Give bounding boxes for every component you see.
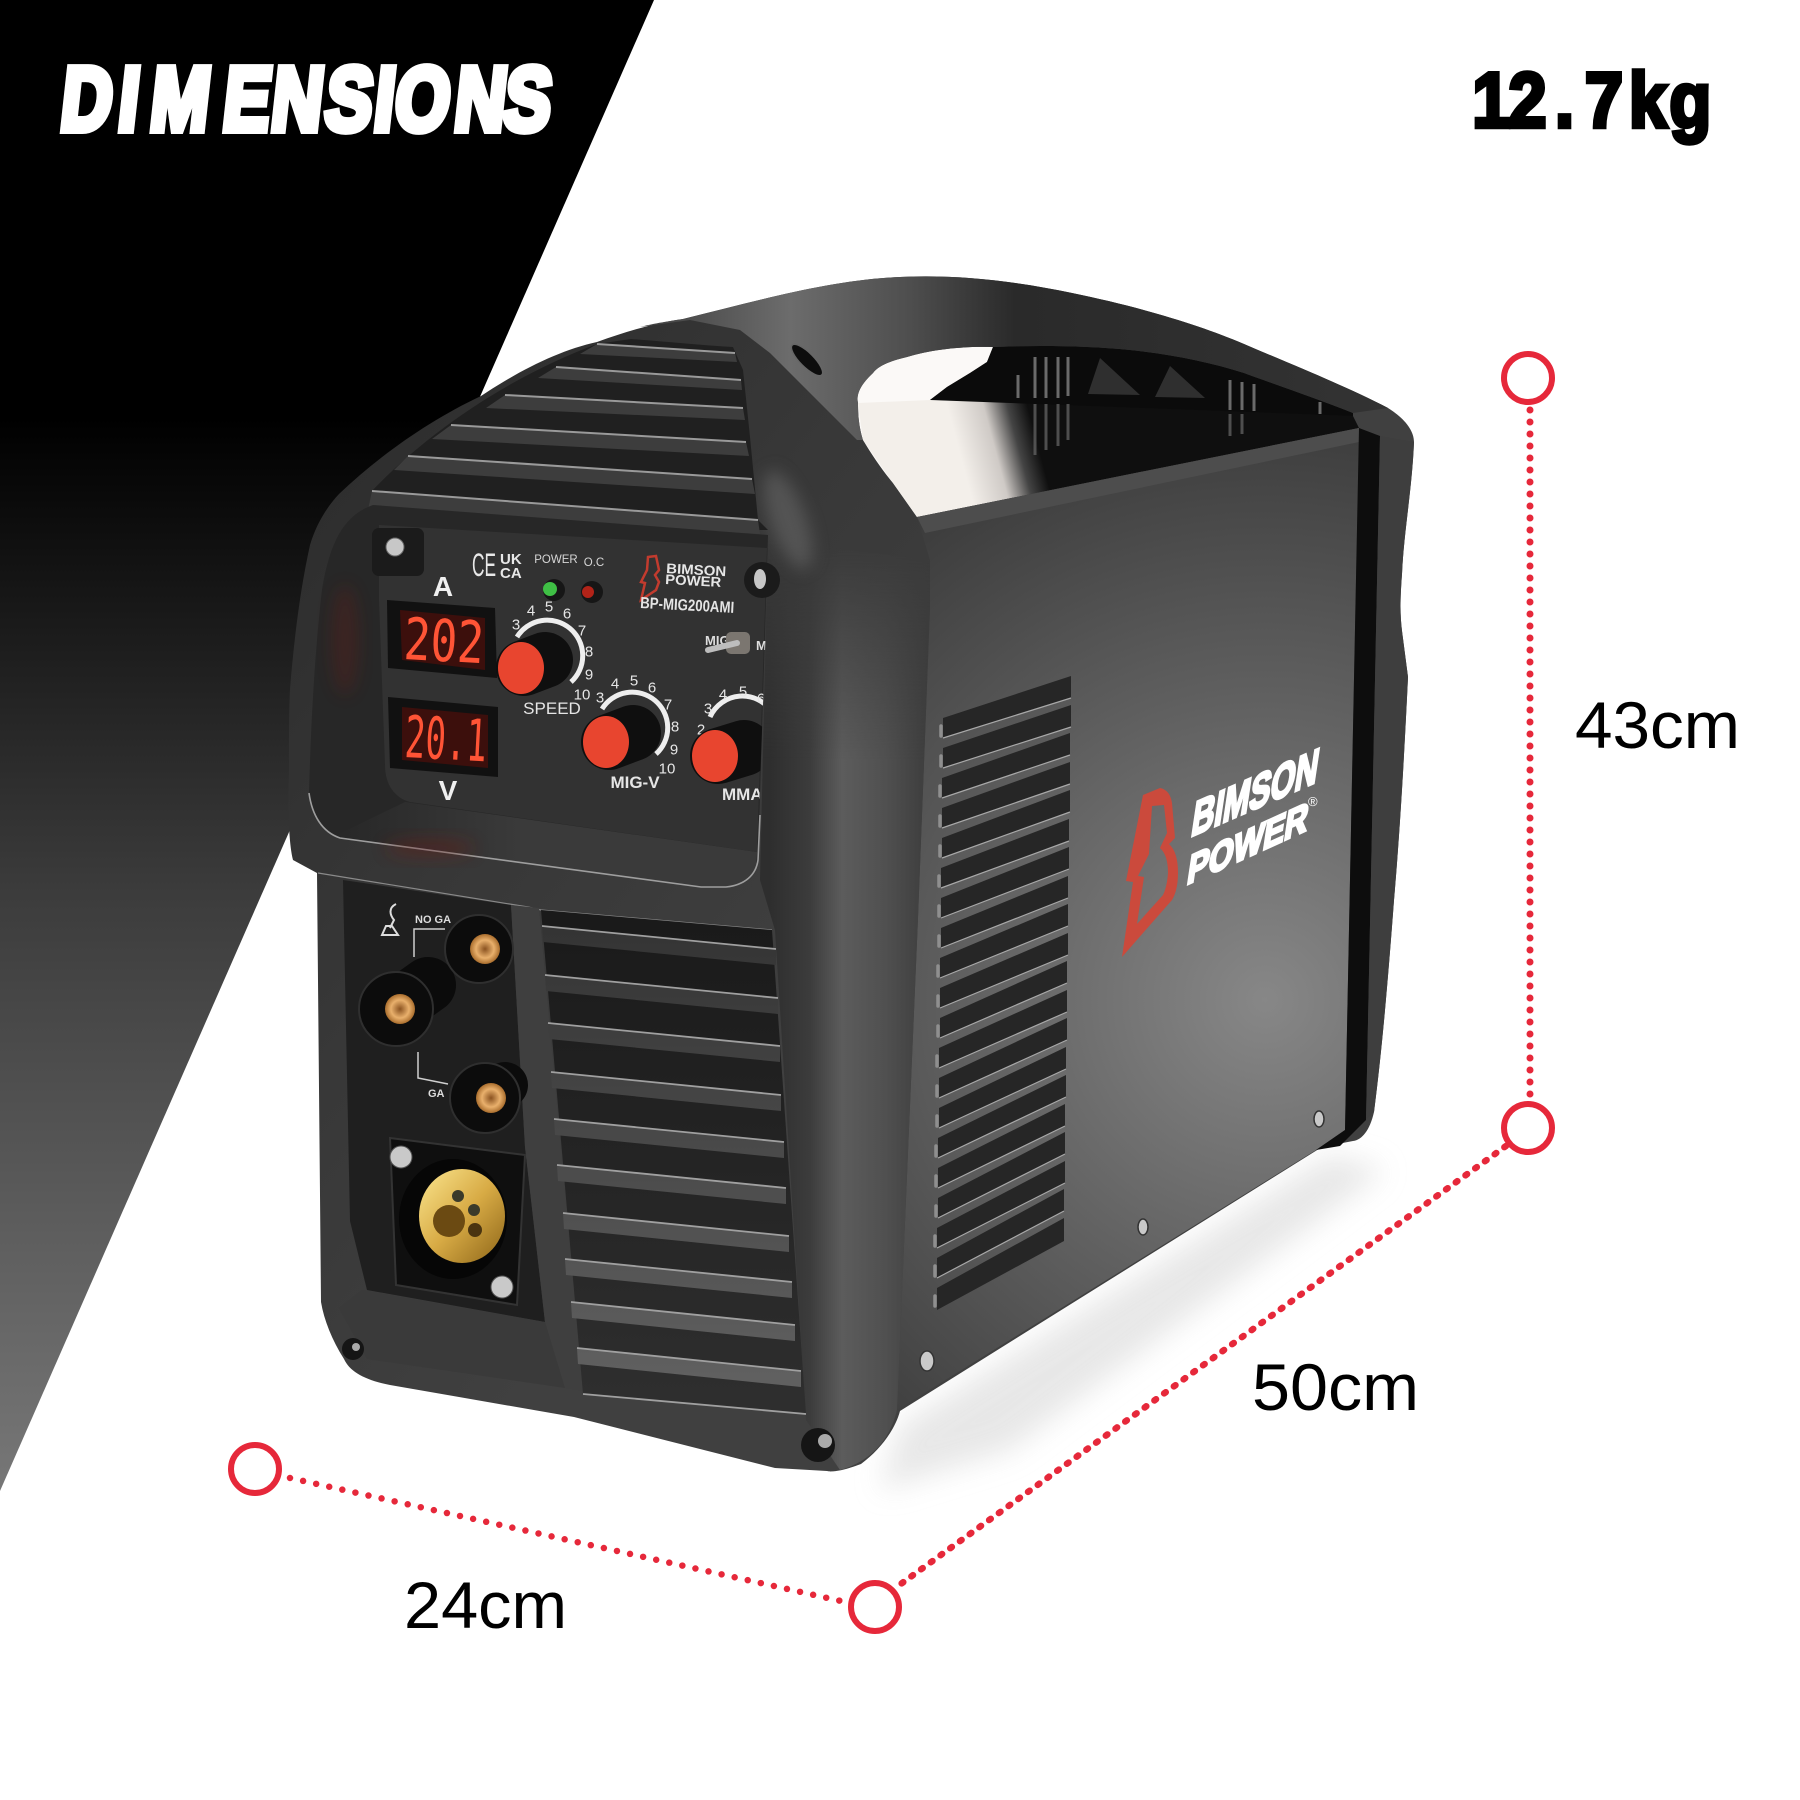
logo wordmark: POWER [1185, 793, 1312, 894]
screw top left [372, 528, 424, 576]
indicator labels: POWER [534, 554, 578, 566]
width label: 24cm [404, 1568, 567, 1642]
speed dial: SPEED [523, 699, 581, 718]
marker bottom [851, 1583, 899, 1631]
recess rim highlight [309, 793, 760, 887]
front corner post [760, 596, 908, 1470]
euro torch connector [390, 1138, 525, 1305]
front vent [541, 910, 806, 1414]
MIG-V dial: MIG-V [610, 773, 660, 792]
floor shadow [880, 1155, 1385, 1490]
label A: A [433, 571, 453, 602]
speed dial: 4 [527, 602, 535, 620]
control panel [372, 525, 780, 852]
recess red glow left [331, 585, 359, 695]
volt display: 20.1 [403, 703, 489, 775]
side logo [1122, 737, 1323, 957]
MMA dial: MMA- [722, 785, 768, 804]
bottom front lip [339, 1290, 565, 1388]
rear plastic edge [1366, 436, 1414, 1120]
speed dial: 6 [563, 606, 571, 622]
upper housing lower lip line [318, 873, 772, 930]
MIG-V dial: 7 [664, 696, 672, 714]
logo wordmark: ® [1308, 794, 1318, 809]
MMA dial: 6 [757, 690, 765, 708]
model number: BP-MIG200AMI [640, 595, 735, 617]
height label: 43cm [1575, 688, 1740, 762]
panel brand logo: BIMSON [666, 560, 727, 579]
control recess [309, 505, 768, 887]
mode switch: MIG [705, 633, 730, 648]
center divider bar [511, 905, 583, 1391]
certification marks: CE [472, 547, 496, 583]
speed dial: 5 [545, 598, 553, 616]
MIG-V dial: 5 [630, 672, 638, 690]
MIG-V dial [583, 672, 679, 792]
length dimension line [898, 1146, 1506, 1586]
lower front socket panel [343, 880, 545, 1322]
MIG-V dial: 3 [596, 690, 604, 706]
recess red glow bottom [385, 838, 475, 858]
black diagonal background panel [0, 0, 654, 1491]
speed dial: 8 [585, 644, 593, 660]
speed dial: 7 [578, 622, 586, 640]
side screws [920, 1111, 1324, 1371]
marker right [1504, 1104, 1552, 1152]
MMA dial: 4 [719, 686, 727, 704]
top plate reflections [1035, 404, 1242, 455]
MIG-V dial: 6 [648, 680, 656, 696]
marker left [231, 1445, 279, 1493]
weight: 12.7kg [1472, 56, 1711, 144]
front screws [342, 1338, 835, 1462]
screw top right [744, 562, 780, 598]
torch icon and gas labels [382, 904, 451, 1100]
top plate [858, 400, 1359, 517]
panel face [379, 525, 767, 852]
machine silhouette [288, 276, 1414, 1471]
label V: V [439, 775, 458, 806]
MMA dial: 2 [697, 722, 705, 738]
welder machine [288, 276, 1414, 1471]
speed dial: 3 [512, 616, 520, 634]
speed dial: 9 [585, 666, 593, 684]
length label: 50cm [1252, 1350, 1419, 1424]
certification marks: UK [500, 551, 522, 568]
MMA dial [690, 686, 764, 800]
MMA dial: 3 [704, 700, 712, 718]
MIG-V dial: 8 [671, 718, 679, 736]
logo mark [1122, 788, 1178, 957]
speed dial: 10 [574, 686, 590, 704]
volt display [388, 697, 498, 777]
indicator labels: O.C [584, 557, 604, 569]
logo wordmark: BIMSON [1188, 737, 1323, 848]
rear black channel [1316, 428, 1380, 1150]
indicator LEDs [543, 579, 603, 603]
output sockets [359, 915, 520, 1133]
torch icon and gas labels: GA [428, 1088, 445, 1100]
handle opening [858, 347, 1000, 517]
MIG-V dial: 10 [659, 760, 675, 778]
panel brand logo: POWER [665, 571, 722, 590]
panel brand logo [641, 556, 727, 600]
handle band [640, 276, 1388, 440]
MIG-V dial: 9 [670, 742, 678, 758]
handle mount hole [787, 340, 827, 380]
mode switch [705, 632, 767, 654]
indicator labels [534, 554, 604, 569]
shoulder highlight [753, 465, 823, 575]
side louvers [935, 676, 1071, 1310]
speed dial [498, 598, 593, 718]
marker top [1504, 354, 1552, 402]
top vent [368, 339, 768, 534]
title: DIMENSIONS [56, 50, 557, 150]
certification marks: CA [500, 565, 522, 582]
ampere display: 202 [402, 605, 486, 677]
MMA dial: 5 [739, 684, 747, 700]
MIG-V dial: 4 [611, 676, 619, 692]
width dimension line [290, 1478, 850, 1603]
side top bevel [917, 428, 1359, 533]
torch icon and gas labels: NO GA [415, 914, 451, 926]
logo wordmark [1185, 737, 1323, 894]
mode switch: M [756, 638, 767, 653]
recess lower wall [335, 802, 757, 887]
side panel [897, 428, 1359, 1410]
height dimension line [1526, 410, 1534, 1098]
handle underside struts [930, 346, 1353, 420]
